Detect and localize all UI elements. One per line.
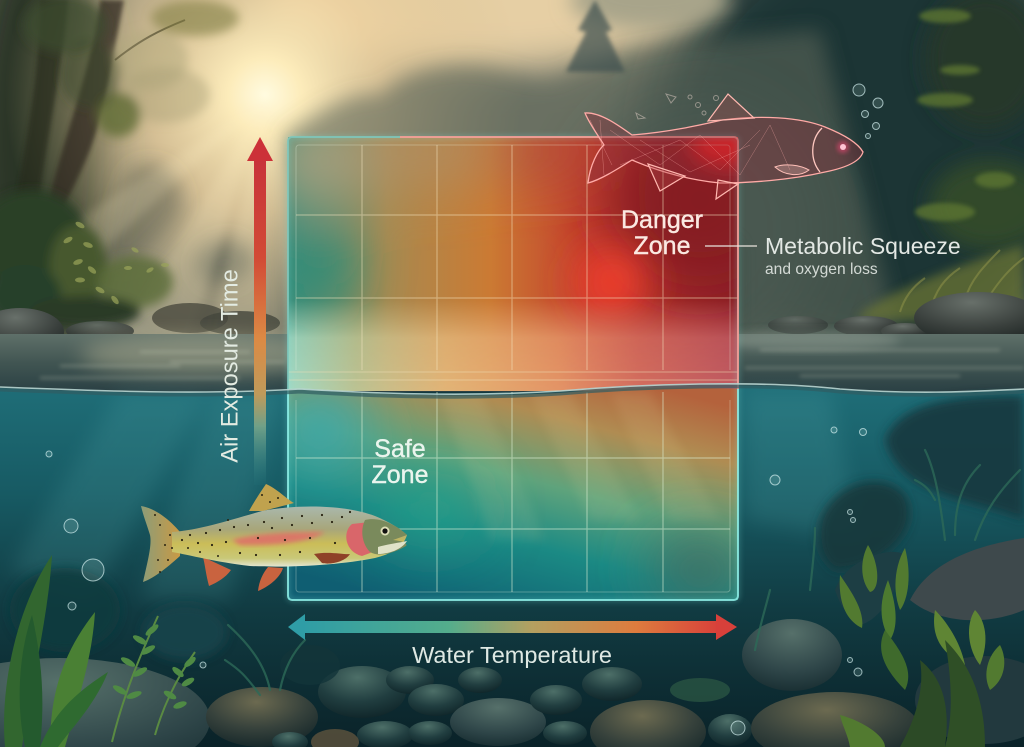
grid lines xyxy=(296,145,738,592)
spots xyxy=(154,494,351,573)
body xyxy=(172,507,407,567)
frame glow xyxy=(288,137,738,600)
bubbles xyxy=(46,84,883,735)
air exposure axis label: Air Exposure Time xyxy=(217,269,243,463)
safe zone label: Zone xyxy=(372,461,428,489)
reflected glow at water line xyxy=(288,300,738,395)
red stripe xyxy=(232,532,325,545)
distant conifer xyxy=(566,0,625,72)
mesh lines xyxy=(590,120,790,175)
dorsal fin xyxy=(249,484,294,511)
ripple lines xyxy=(288,372,738,380)
shed fragments xyxy=(636,94,718,119)
aquatic plants xyxy=(4,450,1020,747)
water temperature axis label: Water Temperature xyxy=(412,642,612,668)
background boulders xyxy=(10,395,1024,660)
rocks on right shore xyxy=(768,292,1024,344)
right kelp xyxy=(840,545,1004,747)
underwater xyxy=(0,386,1024,747)
sun rays xyxy=(30,100,340,340)
inner frame xyxy=(296,145,730,592)
dim background weeds xyxy=(225,450,1020,695)
light shafts xyxy=(10,392,860,600)
forest on the right xyxy=(860,0,1024,320)
water surface line xyxy=(0,384,1024,396)
head xyxy=(362,519,407,554)
dorsal fin xyxy=(708,94,754,121)
chart: air exposure versus water temperature grid xyxy=(284,133,742,604)
light beams under surface xyxy=(440,392,720,540)
frame xyxy=(288,137,738,600)
danger zone label: Zone xyxy=(634,232,690,260)
water surface band xyxy=(0,330,1024,392)
pectoral fin xyxy=(314,553,350,564)
rocks on the river bed xyxy=(0,538,1024,747)
danger zone label: Danger xyxy=(621,206,703,234)
left blades xyxy=(4,555,108,747)
forest on the left xyxy=(0,0,239,328)
water temperature axis arrow xyxy=(288,614,737,640)
lower fins xyxy=(648,164,685,191)
sky and haze background xyxy=(0,0,1024,370)
healthy trout xyxy=(141,484,407,591)
heat field below water xyxy=(275,385,750,606)
lower fins xyxy=(203,557,231,586)
gill cover xyxy=(346,522,378,556)
heat field above water xyxy=(288,137,738,391)
eye xyxy=(837,141,849,153)
stressed wireframe fish xyxy=(585,94,863,199)
air exposure axis arrow xyxy=(247,137,273,485)
eye xyxy=(380,526,390,536)
metabolic squeeze callout: Metabolic Squeeze xyxy=(765,233,961,259)
shrub leaves xyxy=(62,220,169,305)
danger zone connector xyxy=(705,245,757,247)
metabolic squeeze callout xyxy=(765,233,961,278)
tail xyxy=(141,506,180,582)
red glow at frame corner xyxy=(682,137,738,178)
distant tree line xyxy=(100,30,900,345)
metabolic squeeze callout: and oxygen loss xyxy=(765,261,878,278)
safe zone label: Safe xyxy=(374,435,426,463)
rocks on left shore xyxy=(0,303,280,356)
